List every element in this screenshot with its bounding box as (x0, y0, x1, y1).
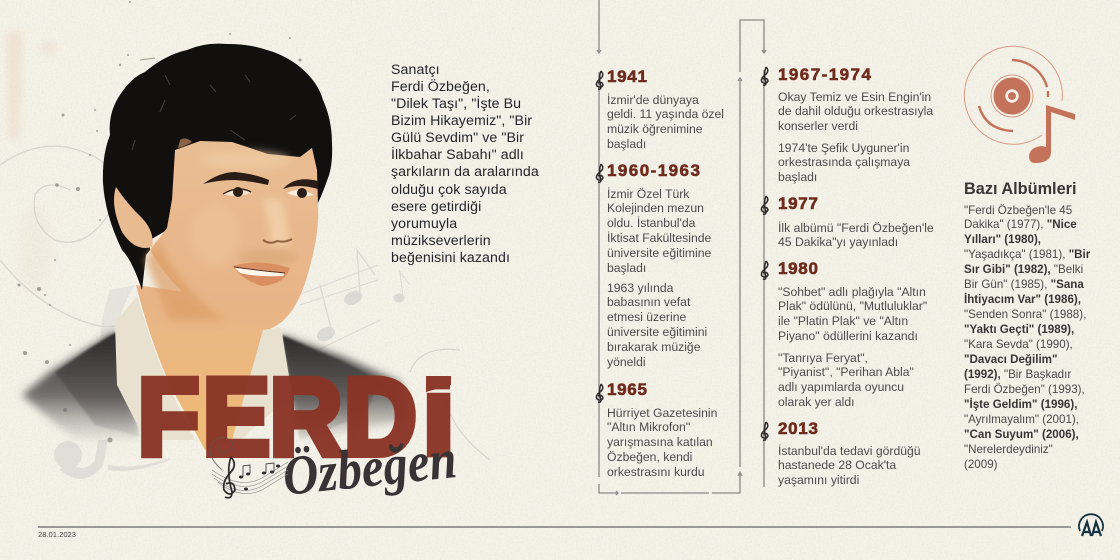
clef 1965 (596, 384, 603, 402)
timeline column 2 (778, 65, 934, 487)
icon: vinyl record with music note (964, 46, 1075, 163)
portrait of Ferdi Özbeğen (22, 44, 410, 450)
name: FERDİ: FERD (138, 356, 417, 478)
text 1965: Hürriyet Gazetesinin "Altın Mikrofon" yarışmasına katılan Özbeğen, kendi orkestrasını kurdu (607, 406, 717, 479)
mouth (233, 262, 290, 286)
heading 1980: 1980 (778, 259, 819, 278)
arrow: bottom connector (599, 472, 742, 495)
timeline column 1 (607, 67, 724, 479)
line: first column (598, 72, 600, 477)
text 1941: İzmir'de dünyaya geldi. 11 yaşında özel müzik öğrenimine başladı (607, 92, 724, 151)
faint treble clef decoration (0, 146, 490, 460)
line: connector rising (738, 78, 742, 467)
heading 1967-1974: 1967-1974 (778, 65, 872, 84)
text 1967-1974: Okay Temiz ve Esin Engin'in de dahil olduğu orkestrasıyla konserler verdi (778, 90, 933, 133)
clef 1967 (761, 67, 768, 85)
clef 2013 (761, 422, 768, 440)
pink watercolor stain (6, 30, 56, 295)
clef markers (596, 67, 768, 440)
clef 1960 (596, 164, 603, 182)
small staff with clef and notes (212, 457, 288, 498)
heading 1941: 1941 (607, 67, 648, 86)
heading 1977: 1977 (778, 194, 819, 213)
text 1980: "Sohbet" adlı plağıyla "Altın Plak" ödülünü, "Mutluluklar" ile "Platin Plak" ve "Altın Piyano" ödüllerini kazandı (778, 284, 927, 343)
text 2013: İstanbul'da tedavi gördüğü hastanede 28 Ocak'ta yaşamını yitirdi (778, 444, 921, 487)
jacket (22, 332, 410, 440)
clef 1941 (596, 71, 603, 89)
text 1980 film roles: "Tanrıya Feryat", "Piyanist", "Perihan Abla" adlı yapımlarda oyuncu olarak yer aldı (778, 350, 914, 409)
name: Özbeğen: Özbeğen (280, 428, 459, 508)
heading 2013: 2013 (778, 419, 819, 438)
eyebrows (203, 172, 269, 185)
heading 1960-1963: 1960-1963 (607, 161, 701, 180)
albums list: "Ferdi Özbeğen'le 45 Dakika" (1977), "Nice Yılları" (1980), "Yaşadıkça" (1981), "Bir Sır Gibi" (1982), "Belki Bir Gün" (1985), "Sana İhtiyacım Var" (1986), "Senden Sonra" (1988), "Yaktı Geçti" (1989), "Kara Sevda" (1990), "Davacı Değilim" (1992), "Bir Başkadır Ferdi Özbeğen" (1993), "İşte Geldim" (1996), "Ayrılmayalım" (2001), "Can Suyum" (2006), "Nerelerdeydiniz" (2009) (964, 204, 1090, 471)
text 1974: 1974'te Şefik Uyguner'in orkestrasında çalışmaya başladı (778, 140, 910, 184)
intro text: Sanatçı Ferdi Özbeğen, "Dilek Taşı", "İşte Bu Bizim Hikayemiz", "Bir Gülü Sevdim" ve "Bir İlkbahar Sabahı" adlı şarkıların da aralarında olduğu çok sayıda esere getirdiği yorumuyla müzikseverlerin beğenisini kazandı (391, 62, 539, 266)
hair (103, 44, 332, 290)
ear (114, 187, 153, 248)
arrow: into first column (597, 0, 601, 53)
faint clef blob (54, 285, 170, 479)
nose (263, 239, 292, 243)
line: second column (763, 70, 765, 487)
heading 1965: 1965 (607, 380, 648, 399)
eyes (223, 189, 251, 196)
text 1960-1963: İzmir Özel Türk Kolejinden mezun oldu. İstanbul'da İktisat Fakültesinde üniversite eğitimine başladı (607, 186, 711, 275)
name: FERDİ: İ (420, 375, 457, 476)
arrow: into second column (740, 20, 766, 72)
date: 28.01.2023 (38, 530, 76, 539)
shirt collar (115, 296, 292, 440)
text 1977: İlk albümü "Ferdi Özbeğen'le 45 Dakika"yı yayınladı (778, 220, 934, 249)
logo: AA (1079, 514, 1103, 536)
clef 1980 (761, 261, 768, 279)
clef 1977 (761, 196, 768, 214)
faint music notes right of the head (298, 250, 410, 350)
swirl near name (210, 437, 232, 470)
albums heading: Bazı Albümleri (964, 180, 1076, 198)
ink splatter (18, 1, 302, 442)
face shading (145, 151, 298, 320)
footer rule (38, 526, 1071, 528)
face (150, 141, 318, 329)
hair highlights (132, 58, 296, 150)
neck and chest (136, 285, 272, 450)
text 1963: 1963 yılında babasının vefat etmesi üzerine üniversite eğitimini bırakarak müziğe yöneldi (607, 280, 707, 369)
